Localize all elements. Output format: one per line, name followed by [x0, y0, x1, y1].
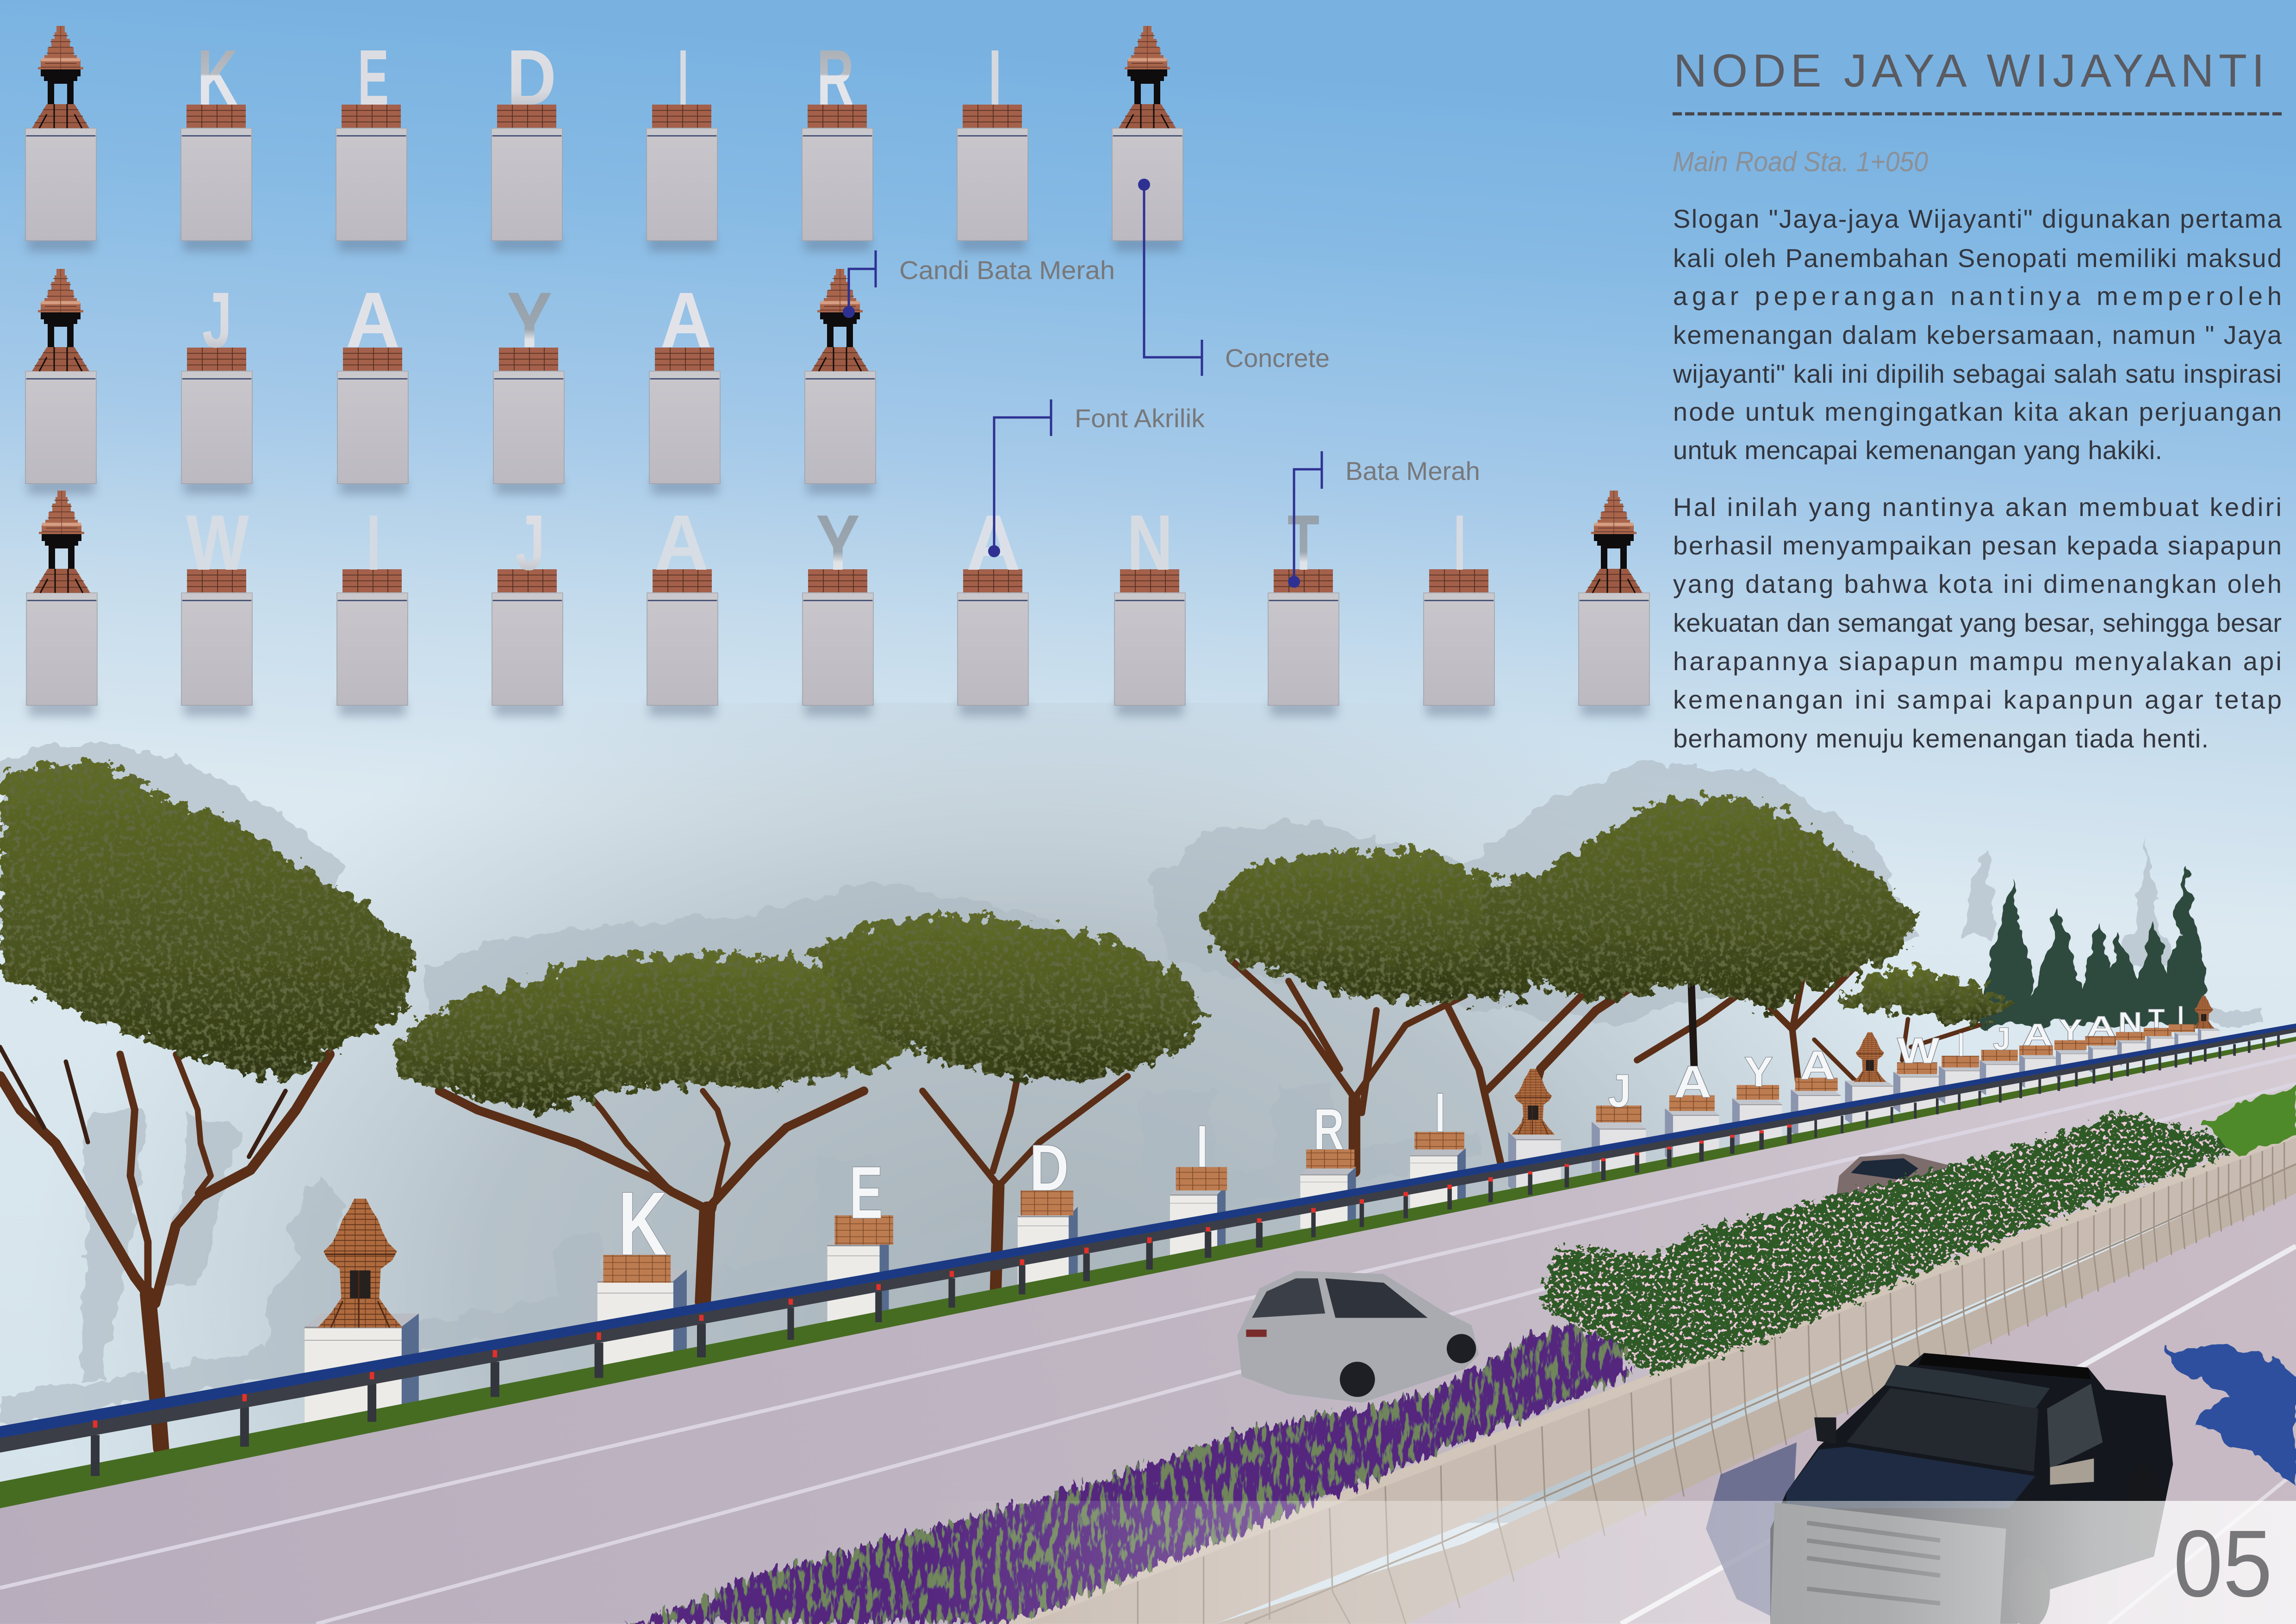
A unit [958, 569, 1028, 716]
canopy: tree 5 [1483, 795, 1921, 1010]
letters JAYA: A [346, 276, 400, 364]
callout: Bata Merah: Bata Merah [1345, 456, 1480, 485]
letters KEDIRI: D [507, 34, 556, 122]
letters KEDIRI: E [358, 34, 389, 122]
pickup shadow on road [1706, 1442, 1797, 1624]
I unit [1424, 569, 1494, 716]
candi 2 [1512, 1069, 1555, 1135]
candi left [25, 26, 96, 251]
candi 1 [318, 1199, 403, 1327]
letters WIJAYANTI: N [1127, 499, 1173, 587]
acrylic letters KEDIRI JAYA WIJAYANTI: J [1608, 1064, 1631, 1117]
acrylic letters KEDIRI JAYA WIJAYANTI: I [1196, 1114, 1208, 1180]
paragraph 2 [1673, 492, 2282, 753]
callout: Concrete [1138, 179, 1330, 376]
pedestal: K [597, 1269, 687, 1366]
car tail lights [1246, 1330, 1267, 1337]
I unit [337, 569, 408, 716]
candi monuments [318, 996, 2215, 1327]
pedestal: I [1939, 1066, 1983, 1104]
paragraph 1 [1673, 204, 2282, 465]
car side window [1325, 1278, 1428, 1318]
scene: road illustration [0, 703, 2296, 1624]
road lane markings [0, 1056, 2296, 1624]
callout: Font Akrilik [988, 399, 1205, 557]
pickup side window [2047, 1384, 2103, 1468]
canopy: tree 4 [1201, 849, 1555, 1003]
letters WIJAYANTI [186, 499, 1466, 587]
wall shadows of trees and monuments [0, 740, 2262, 1428]
candi right [1579, 491, 1649, 716]
letters KEDIRI: R [817, 34, 854, 122]
E unit [336, 105, 407, 251]
I unit [957, 105, 1028, 251]
pedestal: candi 1 [305, 1313, 419, 1423]
candi 4 [2193, 996, 2215, 1028]
monument elevations: row 2 JAYA [25, 269, 876, 494]
paragraph 1: Slogan "Jaya-jaya Wijayanti" digunakan pertama [1673, 204, 2282, 233]
monument pedestals along the road [305, 1028, 2220, 1423]
callout: Concrete: Concrete [1225, 343, 1330, 373]
A unit [337, 348, 408, 494]
sedan window [1851, 1158, 1918, 1180]
page number: 05 [2173, 1511, 2272, 1617]
letters WIJAYANTI: T [1288, 499, 1319, 587]
tree canopies [0, 761, 2013, 1113]
letters KEDIRI: I [678, 34, 688, 122]
paragraph 2: kemenangan ini sampai kapanpun agar tetap [1673, 685, 2282, 714]
pedestal: N [2117, 1039, 2147, 1066]
acrylic letters KEDIRI JAYA WIJAYANTI: E [849, 1151, 883, 1234]
pedestal: I [1170, 1186, 1226, 1257]
letters WIJAYANTI: W [186, 499, 249, 587]
rail posts [95, 1035, 2278, 1476]
acrylic letters KEDIRI JAYA WIJAYANTI: I [1958, 1026, 1965, 1064]
pine trees [1980, 868, 2211, 1025]
pickup mirror left [1814, 1418, 1836, 1444]
pedestal: E [828, 1234, 889, 1322]
page number band [0, 1501, 2296, 1624]
acrylic letters KEDIRI JAYA WIJAYANTI: K [618, 1172, 668, 1274]
sedan body [1835, 1154, 1950, 1215]
letters WIJAYANTI: A [654, 499, 709, 587]
monument elevations: row 1 KEDIRI [25, 26, 1183, 251]
letters WIJAYANTI: Y [816, 499, 860, 587]
grass verge [0, 1037, 2296, 1511]
acrylic letters KEDIRI JAYA WIJAYANTI: J [1993, 1021, 2010, 1057]
pickup body [1770, 1353, 2173, 1624]
tree shadow on lower road [2165, 1346, 2296, 1485]
pickup sunroof [1918, 1353, 2091, 1379]
letters JAYA: Y [507, 276, 552, 364]
acrylic letters KEDIRI JAYA WIJAYANTI: A [2022, 1017, 2053, 1052]
pedestal: Y [2056, 1050, 2090, 1081]
pickup roof [1885, 1365, 2050, 1409]
acrylic letters KEDIRI JAYA WIJAYANTI: R [1313, 1096, 1344, 1162]
J unit [181, 348, 252, 494]
car body [1237, 1271, 1479, 1403]
letters WIJAYANTI: I [366, 499, 381, 587]
I unit [647, 105, 717, 251]
acrylic letters KEDIRI JAYA WIJAYANTI: A [1799, 1042, 1836, 1088]
letters WIJAYANTI: I [1454, 499, 1466, 587]
acrylic letters KEDIRI JAYA WIJAYANTI: I [2178, 1001, 2184, 1030]
rail beam [0, 1024, 2296, 1453]
pedestal: D [1018, 1207, 1078, 1286]
pickup windshield [1847, 1388, 2038, 1472]
rail beam highlight [0, 1024, 2296, 1438]
pedestal: A [1665, 1108, 1719, 1163]
candi right [805, 269, 876, 494]
J unit [492, 569, 563, 716]
T unit [1268, 569, 1339, 716]
pedestal: W [1893, 1072, 1940, 1113]
pedestal: R [1300, 1167, 1356, 1229]
car wheel front [1447, 1334, 1476, 1363]
candi right [1112, 26, 1183, 251]
concrete median barrier [993, 1129, 2296, 1624]
pedestal: Y [1732, 1098, 1782, 1150]
A unit [649, 348, 720, 494]
canopy: tree 1 [0, 761, 417, 1081]
acrylic letters KEDIRI JAYA WIJAYANTI: I [1435, 1082, 1445, 1144]
brick plinths [604, 1024, 2195, 1283]
pedestal: J [1592, 1122, 1646, 1180]
acrylic letters KEDIRI JAYA WIJAYANTI: Y [2059, 1013, 2082, 1047]
black pickup truck [1770, 1353, 2173, 1624]
pedestal: A [2088, 1045, 2120, 1073]
letters JAYA: A [660, 276, 712, 364]
green grass clump [2204, 1085, 2296, 1157]
candi 3 [1854, 1033, 1886, 1082]
R unit [802, 105, 873, 251]
acrylic letters KEDIRI JAYA WIJAYANTI: A [1674, 1056, 1712, 1107]
lavender planting [629, 1328, 1630, 1624]
pedestal: I [2174, 1033, 2199, 1053]
brown sedan [1835, 1154, 1950, 1215]
paragraph 2: berhasil menyampaikan pesan kepada siapapun [1673, 531, 2282, 560]
barrier panel joints [1138, 1142, 2286, 1624]
candi left [26, 491, 97, 716]
acrylic letters KEDIRI JAYA WIJAYANTI: N [2118, 1007, 2142, 1039]
pickup front grille [1770, 1502, 2006, 1624]
paragraph 2: harapannya siapapun mampu menyalakan api [1673, 647, 2282, 676]
fog over horizon [0, 703, 2296, 1523]
acrylic letters KEDIRI JAYA WIJAYANTI: W [1897, 1030, 1940, 1071]
pedestal: T [2147, 1035, 2174, 1058]
title: NODE JAYA WIJAYANTI [1674, 45, 2265, 97]
A unit [647, 569, 718, 716]
Y unit [803, 569, 873, 716]
barrier lower seam [1244, 1164, 2296, 1624]
letters KEDIRI: I [989, 34, 1002, 122]
guard rail [0, 1024, 2296, 1476]
pedestal: I [1410, 1148, 1466, 1209]
letters KEDIRI: K [197, 34, 238, 122]
paragraph 2: Hal inilah yang nantinya akan membuat kediri [1673, 492, 2282, 522]
dashed divider [1673, 112, 2282, 116]
pedestal: A [2019, 1054, 2057, 1088]
barrier flare [1215, 1164, 2296, 1624]
paragraph 2: berhamony menuju kemenangan tiada henti. [1673, 724, 2209, 753]
letters JAYA: J [202, 276, 232, 364]
monument elevations: row 3 WIJAYANTI [26, 491, 1649, 716]
K unit [181, 105, 252, 251]
D unit [492, 105, 562, 251]
acrylic letters KEDIRI JAYA WIJAYANTI [618, 1001, 2184, 1274]
Y unit [493, 348, 564, 494]
letters JAYA [202, 276, 712, 364]
paragraph 1: wijayanti" kali ini dipilih sebagai salah satu inspirasi [1673, 359, 2282, 388]
N unit [1114, 569, 1185, 716]
W unit [181, 569, 252, 716]
silver car [1237, 1271, 1479, 1403]
paragraph 1: kemenangan dalam kebersamaan, namun " Jaya [1673, 320, 2282, 349]
pedestal: J [1980, 1060, 2022, 1095]
tree trunks and branches [0, 959, 1980, 1448]
canopy: tree 3 [808, 914, 1207, 1083]
pickup hood [1786, 1447, 2035, 1508]
barrier cap [993, 1129, 2296, 1624]
flowering hedge [1545, 1111, 2232, 1375]
paragraph 1: node untuk mengingatkan kita akan perjuangan [1673, 397, 2282, 426]
paragraph 1: kali oleh Panembahan Senopati memiliki maksud [1673, 243, 2282, 273]
pickup mirror right [2050, 1458, 2094, 1485]
car rear window [1252, 1278, 1325, 1318]
pickup rear wheel [2126, 1464, 2161, 1552]
car wheel rear [1340, 1362, 1375, 1397]
acrylic letters KEDIRI JAYA WIJAYANTI: Y [1744, 1049, 1773, 1096]
pickup grille slats [1807, 1523, 1940, 1603]
pedestal: candi 3 [1845, 1081, 1893, 1125]
letters KEDIRI [197, 34, 1002, 122]
rail red reflectors [95, 1125, 1789, 1428]
canopy: tree 6 [1838, 968, 2013, 1025]
callout: Candi Bata Merah: Candi Bata Merah [899, 255, 1115, 285]
pedestal: A [1791, 1089, 1841, 1138]
paragraph 2: kekuatan dan semangat yang besar, sehingga besar [1673, 608, 2282, 637]
paragraph 1: agar peperangan nantinya memperoleh [1673, 281, 2282, 311]
acrylic letters KEDIRI JAYA WIJAYANTI: D [1029, 1131, 1069, 1205]
acrylic letters KEDIRI JAYA WIJAYANTI: A [2087, 1010, 2116, 1043]
pedestal: candi 2 [1508, 1132, 1561, 1194]
candi left [25, 269, 96, 494]
pickup wheel [2009, 1558, 2050, 1624]
subtitle: Main Road Sta. 1+050 [1673, 146, 1928, 177]
paragraph 2: yang datang bahwa kota ini dimenangkan oleh [1673, 569, 2282, 598]
pedestal: candi 4 [2198, 1028, 2220, 1047]
acrylic letters KEDIRI JAYA WIJAYANTI: T [2148, 1004, 2165, 1034]
upper road surface [0, 1041, 2296, 1624]
lower road surface [1407, 1194, 2296, 1624]
letters WIJAYANTI: J [516, 499, 545, 587]
paragraph 1: untuk mencapai kemenangan yang hakiki. [1673, 436, 2162, 465]
callout: Font Akrilik: Font Akrilik [1075, 404, 1205, 433]
canopy: tree 2 [392, 955, 937, 1113]
lower road lane markings [1621, 1246, 2296, 1624]
callout: Candi Bata Merah [843, 250, 1115, 318]
barrier wall [1025, 1138, 2296, 1624]
callout: Bata Merah [1288, 451, 1480, 588]
letters WIJAYANTI: A [966, 499, 1020, 587]
